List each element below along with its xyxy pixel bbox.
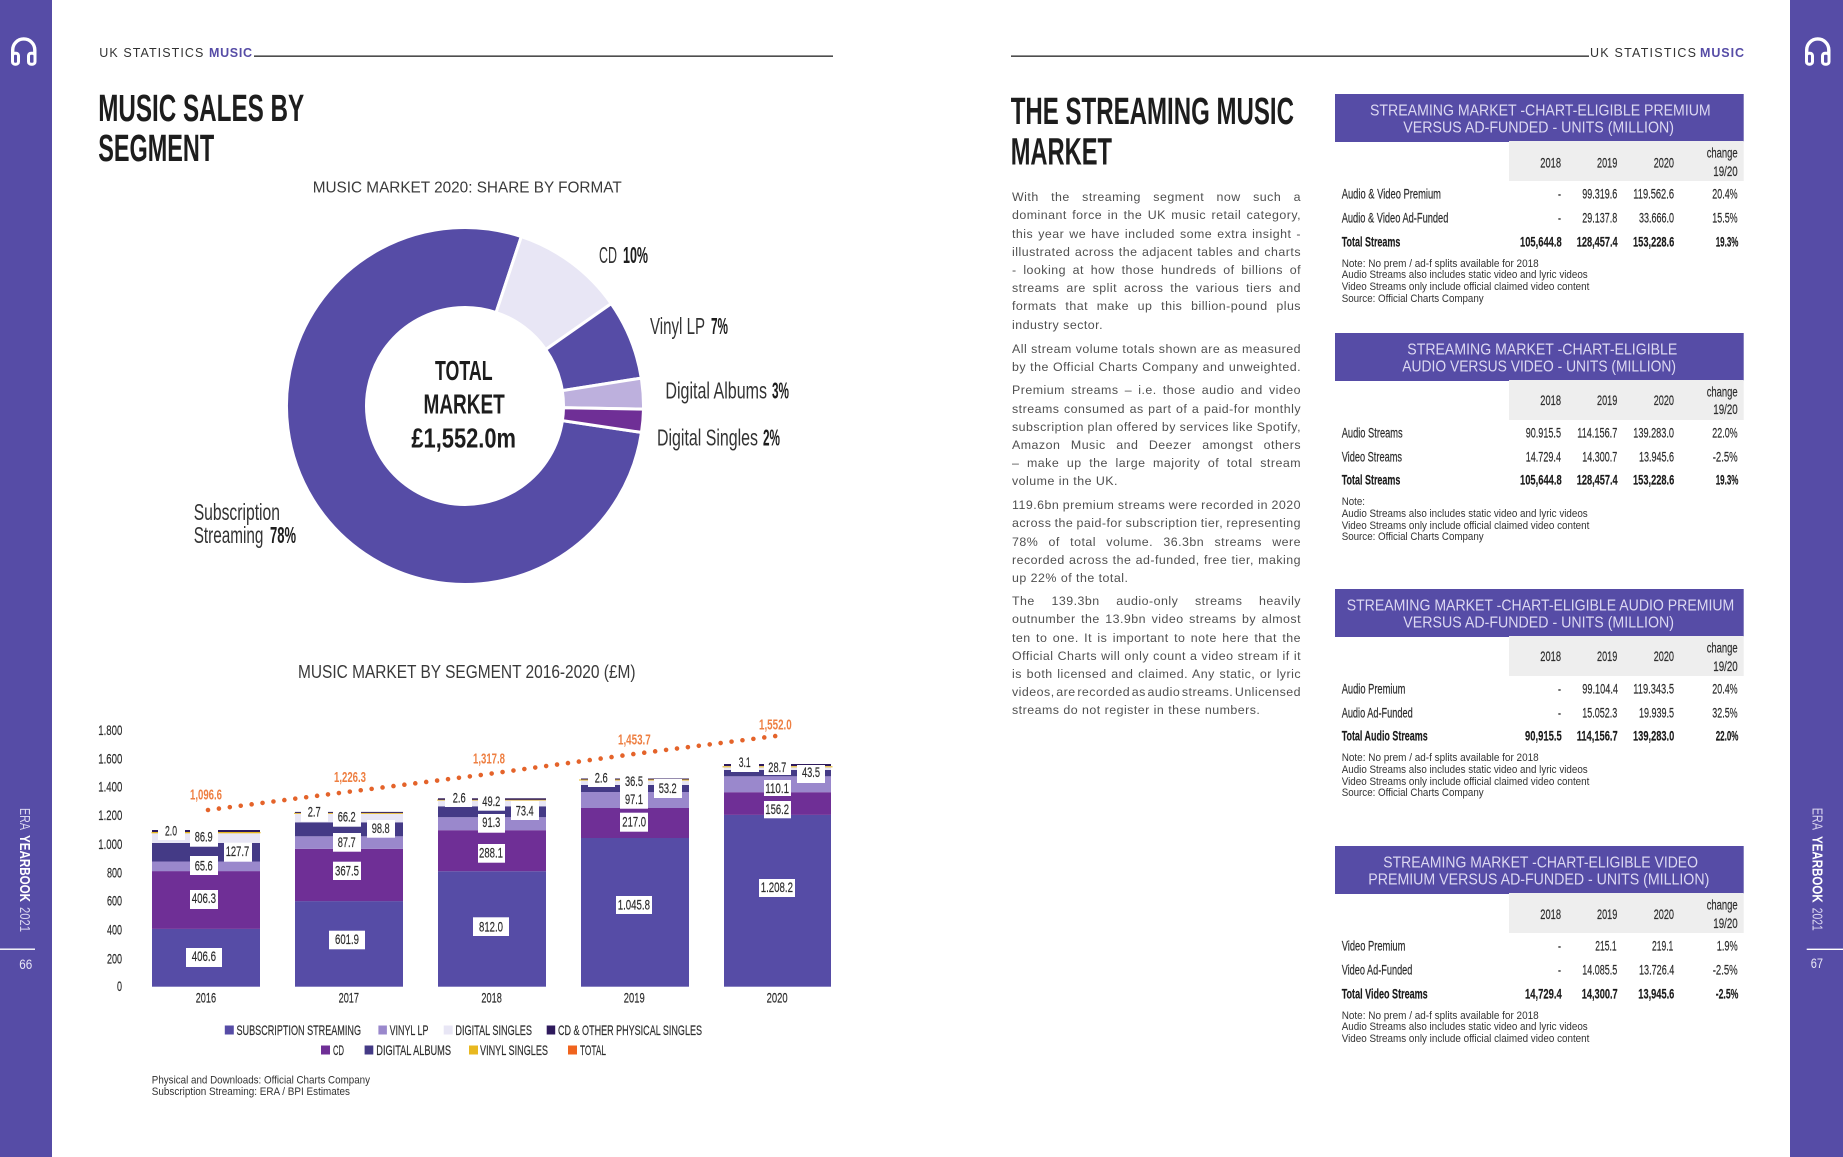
table values: Audio Ad-Funded [1342, 704, 1413, 720]
table values: 2020 [1654, 392, 1674, 408]
text block: paragraph 5: videos, are recorded as audio streams. Unlicensed [1012, 685, 1301, 699]
chart legend: CD & OTHER PHYSICAL SINGLES [558, 1022, 702, 1038]
section header: UK statistics music: UK STATISTICS [1590, 46, 1696, 60]
x axis labels: 2018 [481, 989, 502, 1005]
x axis labels: 2017 [339, 989, 359, 1005]
page number 66: 66 [19, 956, 32, 972]
table values: 20.4% [1712, 185, 1738, 201]
text block: paragraph 5 [1012, 594, 1301, 717]
stacked bar: 2018: 288.1 [479, 846, 503, 860]
total value labels: 1,226.3 [334, 769, 366, 786]
panel: left sidebar [0, 0, 52, 1157]
y axis labels: 1.600 [98, 750, 122, 766]
section header: UK statistics music [1011, 46, 1744, 60]
table values: Total Streams [1342, 233, 1401, 249]
table values [1342, 384, 1739, 487]
text block: paragraph 1: illustrated across the adjacent tables and charts [1012, 245, 1301, 259]
donut centre total: TOTAL [435, 355, 493, 386]
table notes: Audio Streams also includes static video and lyric videos [1342, 1021, 1588, 1033]
table heading [1370, 103, 1711, 137]
table values: 119.562.6 [1633, 185, 1674, 201]
table notes: Note: No prem / ad-f splits available for 2018 [1342, 1010, 1539, 1022]
chart legend: VINYL LP [390, 1022, 428, 1038]
title: Music sales by segment: SEGMENT [98, 128, 214, 170]
table values: Video Ad-Funded [1342, 961, 1412, 977]
stacked bar: 2020: 3.1 [739, 755, 751, 770]
table values: Video Premium [1342, 937, 1405, 953]
table notes: Note: No prem / ad-f splits available for 2018 [1342, 752, 1539, 764]
table notes [1342, 752, 1589, 799]
title: Music sales by segment [98, 88, 304, 170]
heading: share by format: MUSIC MARKET 2020: SHARE BY FORMAT [313, 180, 622, 196]
page number 67: 67 [1811, 955, 1823, 971]
table values: 2020 [1654, 906, 1674, 922]
source note: Subscription Streaming: ERA / BPI Estimates [152, 1086, 350, 1098]
table values: 139,283.0 [1633, 727, 1674, 743]
sidebar label: ERA Yearbook 2021: YEARBOOK [1809, 836, 1826, 903]
text block: paragraph 5: The 139.3bn audio-only streams heavily [1012, 594, 1301, 608]
text block: paragraph 3: Premium streams – i.e. those audio and video [1012, 383, 1301, 397]
total value labels [190, 716, 792, 804]
table values: 99.319.6 [1582, 185, 1617, 201]
text block: paragraph 4: across the paid-for subscription tier, representing [1012, 516, 1301, 530]
title: The streaming music market [1011, 91, 1294, 174]
sidebar label: ERA Yearbook 2021: 2021 [1809, 908, 1826, 931]
x axis labels: 2019 [624, 989, 645, 1005]
table notes: Source: Official Charts Company [1342, 531, 1484, 543]
table values: 153,228.6 [1633, 233, 1674, 249]
table values: Video Streams [1342, 448, 1402, 464]
table heading [1368, 855, 1709, 889]
text block: paragraph 3 [1012, 383, 1301, 488]
table values: 22.0% [1716, 727, 1739, 743]
chart legend: CD [333, 1042, 344, 1058]
table values: 1.9% [1717, 937, 1738, 953]
stacked bar: 2017: 367.5 [335, 864, 359, 878]
donut labels [194, 242, 789, 548]
text block: paragraph 3: volume in the UK. [1012, 474, 1118, 488]
icon: headphones [12, 39, 35, 64]
table heading: PREMIUM VERSUS AD-FUNDED - UNITS (MILLION) [1368, 872, 1709, 889]
table: premium versus ad-funded [1335, 94, 1744, 305]
table heading: STREAMING MARKET -CHART-ELIGIBLE PREMIUM [1370, 103, 1711, 120]
table notes: Video Streams only include official claimed video content [1342, 281, 1589, 293]
stacked bar: 2019: 97.1 [625, 792, 643, 807]
stacked bar: 2018: 73.4 [516, 804, 534, 818]
y axis labels [98, 722, 122, 994]
sidebar label: ERA Yearbook 2021: YEARBOOK [16, 835, 33, 902]
table heading [1347, 598, 1734, 632]
table heading: VERSUS AD-FUNDED - UNITS (MILLION) [1403, 120, 1674, 137]
table notes: Note: No prem / ad-f splits available for 2018 [1342, 258, 1539, 270]
stacked bar: 2016: 406.6 [192, 949, 216, 964]
table values: 19.3% [1716, 471, 1739, 487]
table values: 215.1 [1595, 937, 1617, 953]
table notes: Note: [1342, 496, 1365, 508]
table values: 90,915.5 [1525, 727, 1562, 743]
donut labels: 7% [711, 313, 728, 339]
donut labels: Subscription [194, 499, 280, 525]
y axis labels: 1.400 [98, 779, 122, 795]
chart legend: TOTAL [580, 1042, 606, 1058]
stacked bar: 2019: 53.2 [659, 781, 677, 796]
stacked bar: 2016 [152, 824, 260, 987]
donut centre total [411, 355, 516, 454]
stacked bar: 2019 [579, 770, 689, 987]
table values: 2019 [1597, 154, 1617, 170]
table values: Audio Premium [1342, 680, 1405, 696]
table notes: Video Streams only include official claimed video content [1342, 776, 1589, 788]
sidebar label: ERA Yearbook 2021: 2021 [16, 907, 33, 932]
icon: headphones [1806, 39, 1829, 64]
table values: 119.343.5 [1633, 680, 1674, 696]
table values: 2019 [1597, 392, 1617, 408]
stacked bar: 2020: 28.7 [768, 760, 786, 775]
y axis labels: 1.800 [98, 722, 122, 738]
table values: - [1558, 209, 1561, 225]
table values: change [1707, 384, 1738, 400]
table heading: VERSUS AD-FUNDED - UNITS (MILLION) [1403, 615, 1674, 632]
y axis labels: 0 [117, 978, 122, 994]
donut labels: Vinyl LP [650, 313, 705, 339]
table values: 13,945.6 [1638, 985, 1674, 1001]
title: The streaming music market: THE STREAMING MUSIC [1011, 91, 1294, 133]
donut centre total: MARKET [424, 388, 505, 420]
table values: 2018 [1540, 154, 1561, 170]
text block: paragraph 3: – make up the large majority of total stream [1012, 456, 1301, 470]
total value labels: 1,096.6 [190, 786, 222, 804]
table values: 19/20 [1713, 163, 1738, 179]
table values: - [1558, 185, 1561, 201]
donut chart: 2020 share by format [286, 227, 644, 584]
stacked bar: 2018: 91.3 [482, 815, 500, 830]
table notes: Source: Official Charts Company [1342, 293, 1484, 305]
text block: paragraph 1: dominant force in the UK music retail category, [1012, 208, 1301, 222]
table notes [1342, 496, 1589, 543]
table values: change [1707, 145, 1738, 161]
table values: - [1558, 937, 1561, 953]
x axis labels: 2016 [196, 989, 216, 1005]
text block: paragraph 1: - looking at how those hundreds of billions of [1012, 263, 1301, 277]
sidebar label: ERA Yearbook 2021: ERA [1809, 808, 1826, 830]
text block: paragraph 1: this year we have included some extra insight - [1012, 226, 1301, 240]
table heading [1402, 342, 1677, 376]
text block: paragraph 5: streams do not register in these numbers. [1012, 703, 1260, 717]
panel: left page [0, 0, 833, 1157]
table heading: STREAMING MARKET -CHART-ELIGIBLE [1407, 342, 1677, 359]
donut labels: Streaming [194, 522, 263, 548]
stacked bar: 2016: 127.7 [226, 844, 249, 859]
section header: UK statistics music: UK STATISTICS [99, 46, 203, 60]
y axis labels: 600 [107, 893, 122, 909]
table values: change [1707, 897, 1738, 913]
table values: 153,228.6 [1633, 471, 1674, 487]
table values: 13.945.6 [1639, 448, 1674, 464]
y axis labels: 1.200 [98, 807, 122, 823]
y axis labels: 1.000 [98, 836, 122, 852]
table values: 114,156.7 [1577, 727, 1618, 743]
total trend line: dotted [208, 736, 776, 810]
text block: paragraph 4: 78% of total volume. 36.3bn streams were [1012, 535, 1301, 549]
donut labels: Digital Singles [657, 424, 758, 450]
table values: 19/20 [1713, 658, 1738, 674]
table values: 19/20 [1713, 915, 1738, 931]
text block: paragraph 3: streams consumed as part of a paid-for monthly [1012, 402, 1301, 416]
stacked bar: 2020: 156.2 [765, 802, 789, 817]
title: The streaming music market: MARKET [1011, 132, 1112, 174]
table values: change [1707, 640, 1738, 656]
table values: -2.5% [1713, 448, 1738, 464]
text block: paragraph 5: Official Charts will only count a video stream if it [1012, 649, 1301, 663]
stacked bar: 2017 [294, 804, 403, 987]
table values: 29.137.8 [1582, 209, 1617, 225]
table values: 15.052.3 [1582, 704, 1617, 720]
table values: 2018 [1540, 648, 1561, 664]
table values: Total Streams [1342, 471, 1401, 487]
stacked bar: 2016: 2.0 [165, 824, 177, 838]
total value labels: 1,552.0 [759, 716, 792, 734]
stacked bar: 2019: 217.0 [622, 814, 646, 830]
text block: paragraph 4 [1012, 498, 1301, 585]
donut labels: 3% [772, 377, 789, 403]
donut labels: 10% [623, 242, 648, 268]
table notes: Audio Streams also includes static video and lyric videos [1342, 508, 1588, 520]
table notes [1342, 258, 1589, 305]
table values: 2020 [1654, 648, 1674, 664]
stacked bar: 2016: 406.3 [192, 891, 216, 906]
chart legend [225, 1022, 702, 1058]
stacked bar: 2017: 601.9 [335, 932, 359, 947]
chart legend: SUBSCRIPTION STREAMING [236, 1022, 361, 1038]
text block: paragraph 1 [1012, 190, 1301, 332]
stacked bar: 2019: 1.045.8 [618, 898, 650, 912]
table values: 19/20 [1713, 401, 1738, 417]
table values: 2019 [1597, 648, 1617, 664]
table values: 14,300.7 [1582, 985, 1618, 1001]
stacked bar: 2020: 43.5 [802, 765, 820, 780]
table values: 14,729.4 [1525, 985, 1562, 1001]
table values: -2.5% [1716, 985, 1739, 1001]
stacked bar: 2020: 110.1 [765, 781, 789, 796]
table values: 19.939.5 [1639, 704, 1674, 720]
table values: - [1558, 704, 1561, 720]
table values: 219.1 [1652, 937, 1673, 953]
panel: right page [1011, 0, 1843, 1157]
text block: paragraph 1: formats that make up this billion-pound plus [1012, 299, 1301, 313]
stacked bar: 2018: 2.6 [453, 790, 466, 806]
stacked bar: 2017: 66.2 [338, 810, 356, 824]
section header: UK statistics music: MUSIC [1700, 46, 1744, 60]
text block: paragraph 2: by the Official Charts Company and unweighted. [1012, 360, 1301, 374]
stacked bar: 2017: 98.8 [372, 821, 390, 836]
table values: 128,457.4 [1577, 471, 1618, 487]
stacked bar: 2017: 2.7 [308, 804, 321, 820]
total value labels: 1,453.7 [618, 732, 651, 748]
stacked bar: 2016: 86.9 [195, 830, 213, 844]
chart legend: DIGITAL SINGLES [455, 1022, 532, 1038]
table notes: Source: Official Charts Company [1342, 787, 1484, 799]
text block: paragraph 1: streams are split across the various tiers and [1012, 281, 1301, 295]
table values: 105,644.8 [1520, 471, 1562, 487]
table values: 139.283.0 [1633, 424, 1674, 440]
table values: Total Video Streams [1342, 985, 1428, 1001]
table: audio premium versus ad-funded [1335, 589, 1744, 799]
table values: - [1558, 680, 1561, 696]
table values: 114.156.7 [1577, 424, 1617, 440]
title: Music sales by segment: MUSIC SALES BY [98, 88, 304, 130]
text block: paragraph 1: industry sector. [1012, 318, 1103, 332]
donut labels: Digital Albums [665, 377, 767, 403]
table values: 2019 [1597, 906, 1617, 922]
table values: Audio & Video Premium [1342, 185, 1441, 201]
stacked bar: 2017: 87.7 [338, 835, 356, 850]
table values: 14.085.5 [1582, 961, 1617, 977]
donut labels: 78% [270, 522, 296, 548]
text block: paragraph 4: up 22% of the total. [1012, 571, 1128, 585]
heading: market by segment: MUSIC MARKET BY SEGMENT 2016-2020 (£M) [298, 662, 636, 682]
table values: 105,644.8 [1520, 233, 1562, 249]
table values [1342, 145, 1739, 249]
table notes [1342, 1010, 1589, 1045]
sidebar label: ERA Yearbook 2021: ERA [16, 808, 33, 830]
table values: 2020 [1654, 154, 1674, 170]
table values: Audio & Video Ad-Funded [1342, 209, 1448, 225]
table notes: Audio Streams also includes static video and lyric videos [1342, 269, 1588, 281]
table values: 90.915.5 [1526, 424, 1561, 440]
x axis labels: 2020 [767, 989, 788, 1005]
stacked bar: 2016: 65.6 [195, 858, 213, 874]
chart legend: VINYL SINGLES [480, 1042, 548, 1058]
table values: 22.0% [1712, 424, 1738, 440]
donut centre total: £1,552.0m [411, 422, 516, 454]
table values: 32.5% [1712, 704, 1738, 720]
stacked bar: 2019: 36.5 [625, 774, 643, 789]
donut labels: 2% [763, 424, 780, 450]
table values: Total Audio Streams [1342, 727, 1428, 743]
table: video premium versus ad-funded [1335, 846, 1744, 1045]
table values: -2.5% [1713, 961, 1738, 977]
table values: Audio Streams [1342, 424, 1403, 440]
section header: UK statistics music [99, 46, 833, 60]
table values: 33.666.0 [1639, 209, 1674, 225]
total value labels: 1,317.8 [473, 750, 505, 768]
text block: paragraph 5: outnumber the 13.9bn video streams by almost [1012, 612, 1301, 626]
table values: 13.726.4 [1639, 961, 1674, 977]
text block: paragraph 3: Amazon Music and Deezer amongst others [1012, 438, 1301, 452]
table notes: Video Streams only include official claimed video content [1342, 1033, 1589, 1045]
y axis labels: 200 [107, 950, 122, 966]
table heading: AUDIO VERSUS VIDEO - UNITS (MILLION) [1402, 359, 1676, 376]
text block: paragraph 4: 119.6bn premium streams were recorded in 2020 [1012, 498, 1301, 512]
y axis labels: 800 [107, 864, 122, 880]
donut labels: CD [599, 242, 617, 268]
table heading: STREAMING MARKET -CHART-ELIGIBLE VIDEO [1383, 855, 1698, 872]
stacked bar: 2020: 1.208.2 [761, 880, 793, 895]
table values: 14.729.4 [1526, 448, 1561, 464]
table values: 20.4% [1712, 680, 1738, 696]
section header: UK statistics music: MUSIC [209, 46, 252, 60]
source note: Physical and Downloads: Official Charts Company [152, 1074, 370, 1086]
chart legend: DIGITAL ALBUMS [376, 1042, 451, 1058]
table: audio versus video [1335, 333, 1744, 543]
x axis labels [196, 989, 788, 1005]
table heading: STREAMING MARKET -CHART-ELIGIBLE AUDIO PREMIUM [1347, 598, 1734, 615]
text block: paragraph 2: All stream volume totals shown are as measured [1012, 342, 1301, 356]
sidebar label: ERA Yearbook 2021 [16, 808, 33, 932]
table values: 2018 [1540, 392, 1561, 408]
source note [152, 1074, 370, 1098]
table notes: Audio Streams also includes static video and lyric videos [1342, 764, 1588, 776]
table values: 99.104.4 [1582, 680, 1618, 696]
stacked bar: 2020 [722, 755, 832, 987]
table values: - [1558, 961, 1561, 977]
stacked bar: 2018 [437, 790, 546, 987]
text block: paragraph 1: With the streaming segment now such a [1012, 190, 1301, 204]
text block: paragraph 3: subscription plan offered by services like Spotify, [1012, 420, 1301, 434]
text block: paragraph 5: is both licensed and claimed. Any static, or lyric [1012, 667, 1301, 681]
panel: right sidebar [1790, 0, 1843, 1157]
table values: 2018 [1540, 906, 1561, 922]
text block: paragraph 2 [1012, 342, 1301, 374]
text block: paragraph 4: recorded across the ad-funded, free tier, making [1012, 553, 1301, 567]
table values [1342, 897, 1739, 1001]
y axis labels: 400 [107, 921, 122, 937]
stacked bar: 2018: 49.2 [482, 794, 500, 809]
table values: 15.5% [1712, 209, 1738, 225]
stacked bar: 2018: 812.0 [479, 920, 503, 934]
table notes: Video Streams only include official claimed video content [1342, 520, 1589, 532]
table values: 14.300.7 [1582, 448, 1617, 464]
table values [1342, 640, 1739, 743]
table values: 19.3% [1716, 233, 1739, 249]
table values: 128,457.4 [1577, 233, 1618, 249]
text block: paragraph 5: ten to one. It is important to note here that the [1012, 630, 1301, 644]
stacked bar: 2019: 2.6 [595, 770, 608, 786]
